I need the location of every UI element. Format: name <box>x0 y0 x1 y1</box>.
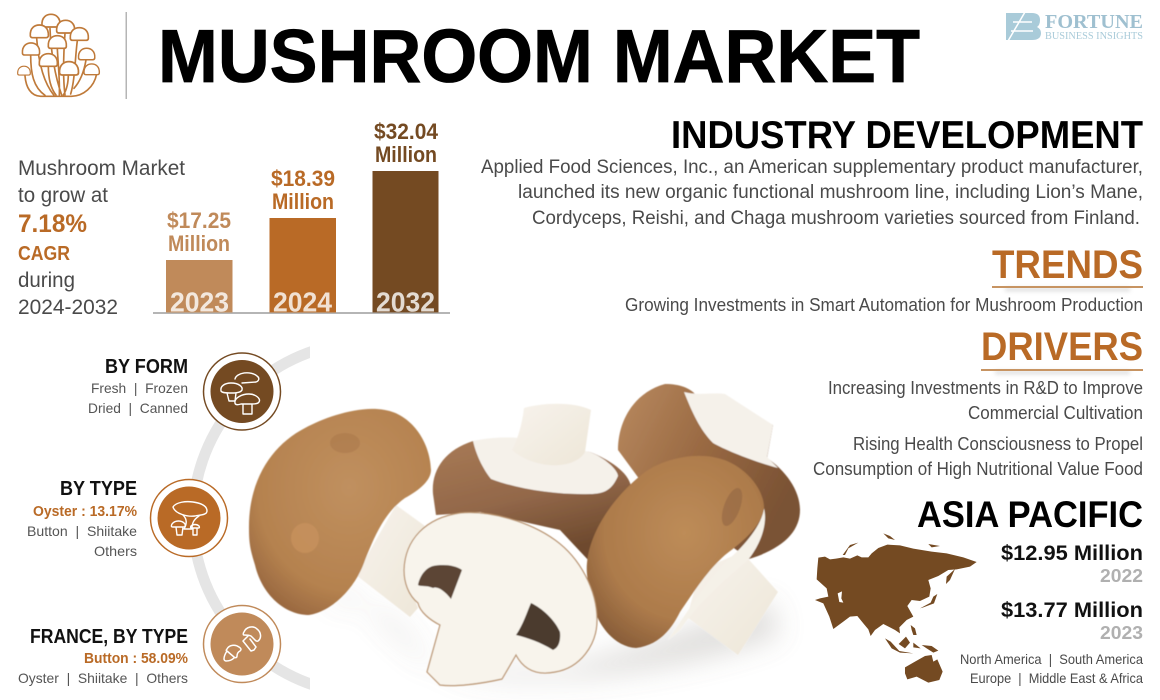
bar: 2024 <box>270 166 336 318</box>
text block: industry development: Applied Food Sciences, Inc., an American supplementary product manufacturer, <box>481 157 1143 178</box>
text block: other regions: North America | South America <box>960 651 1143 667</box>
left mushroom cap <box>249 409 431 615</box>
title: MUSHROOM MARKET <box>158 14 920 98</box>
back-centre mushroom <box>433 404 631 562</box>
illustration: mushrooms photo <box>249 384 800 686</box>
logo: Fortune Business Insights: FORTUNE <box>1045 11 1143 33</box>
callout: CAGR text: to grow at <box>18 184 108 207</box>
bar: 2032: $32.04 <box>374 119 439 144</box>
bar: 2023 <box>166 208 232 318</box>
logo: Fortune Business Insights: BUSINESS INSIGHTS <box>1045 31 1143 42</box>
text block: other regions <box>960 651 1143 686</box>
front-right mushroom stem <box>687 552 778 655</box>
text block: drivers: Commercial Cultivation <box>968 403 1143 423</box>
segment: by type: Others <box>94 543 137 559</box>
bar: 2032 <box>372 119 439 318</box>
segment: by type <box>27 478 137 559</box>
stats: Asia Pacific values: $12.95 Million <box>1001 542 1143 565</box>
segment: by type: Button | Shiitake <box>27 523 137 539</box>
heading: drivers: DRIVERS <box>981 325 1143 369</box>
back-right mushroom <box>618 384 800 559</box>
text block: drivers: Consumption of High Nutritional Value Food <box>813 459 1143 479</box>
left mushroom stem <box>356 505 425 617</box>
text block: drivers <box>813 378 1143 479</box>
logo: Fortune Business Insights <box>1006 11 1143 42</box>
bar: 2023: 2023 <box>170 286 229 318</box>
decorative arc behind segment icons <box>193 345 335 691</box>
segment: France by type: FRANCE, BY TYPE <box>30 626 188 648</box>
map: Asia Pacific <box>815 533 977 683</box>
segment: by form: Fresh | Frozen <box>91 380 188 396</box>
heading: Asia Pacific: ASIA PACIFIC <box>917 494 1143 535</box>
icon: by form <box>204 353 280 430</box>
icon: by type <box>150 480 228 556</box>
text block: other regions: Europe | Middle East & Africa <box>970 670 1143 686</box>
segment: France by type: Button : 58.09% <box>84 651 188 667</box>
callout: CAGR text: CAGR <box>18 243 70 265</box>
bar: 2024: Million <box>272 189 334 214</box>
stats: Asia Pacific values: 2022 <box>1100 566 1143 586</box>
bar: 2032: Million <box>375 142 437 167</box>
segment: France by type: Oyster | Shiitake | Others <box>18 670 188 686</box>
icon: France by type <box>204 606 280 682</box>
bar: 2024: 2024 <box>273 286 332 318</box>
callout: CAGR text: 2024-2032 <box>18 296 118 319</box>
callout: CAGR text: 7.18% <box>18 210 87 238</box>
front-right mushroom cap <box>668 508 765 640</box>
heading: trends: TRENDS <box>992 243 1143 287</box>
bar chart: market size <box>153 119 450 318</box>
segment: by form: BY FORM <box>105 356 188 378</box>
segment: France by type <box>18 626 188 686</box>
callout: CAGR text <box>18 157 185 319</box>
text block: industry development <box>481 157 1143 229</box>
cut mushroom <box>404 513 597 686</box>
segment: by form: Dried | Canned <box>88 400 188 416</box>
text block: industry development: launched its new organic functional mushroom line, including Lion’s Mane, <box>518 182 1143 203</box>
bar: 2023: $17.25 <box>167 208 231 233</box>
stats: Asia Pacific values: 2023 <box>1100 623 1143 643</box>
callout: CAGR text: Mushroom Market <box>18 157 185 180</box>
stats: Asia Pacific values <box>1001 542 1143 643</box>
text block: drivers: Increasing Investments in R&D to Improve <box>828 378 1143 398</box>
ground shadows <box>320 590 780 679</box>
segment: by type: BY TYPE <box>60 478 137 500</box>
segment: by type: Oyster : 13.17% <box>33 504 137 520</box>
text block: drivers: Rising Health Consciousness to Propel <box>853 434 1143 454</box>
segment: by form <box>88 356 188 416</box>
icon: mushroom cluster logo <box>18 14 99 96</box>
bar: 2024: $18.39 <box>271 166 335 191</box>
stats: Asia Pacific values: $13.77 Million <box>1001 599 1143 622</box>
text block: industry development: Cordyceps, Reishi, and Chaga mushroom varieties sourced from Finland. <box>532 208 1140 229</box>
bar: 2032: 2032 <box>376 286 435 318</box>
callout: CAGR text: during <box>18 269 75 292</box>
bar: 2023: Million <box>168 231 230 256</box>
text block: trends: Growing Investments in Smart Automation for Mushroom Production <box>625 295 1143 315</box>
